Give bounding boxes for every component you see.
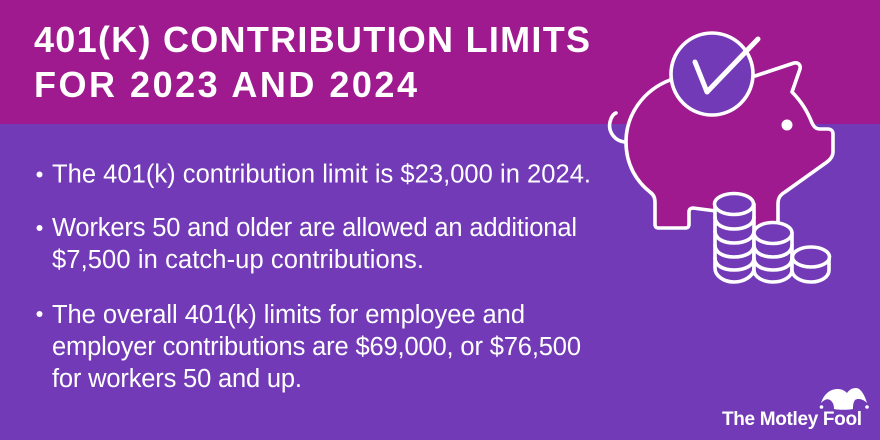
jester bell right	[865, 405, 869, 409]
bullet 2: $7,500 in catch-up contributions.	[52, 246, 424, 274]
check mark	[695, 39, 758, 92]
panel: lower background	[0, 124, 880, 440]
bullet 3	[36, 301, 581, 393]
title	[34, 19, 590, 105]
bullet 2: Workers 50 and older are allowed an additional	[52, 214, 577, 242]
logo: The Motley Fool	[722, 388, 869, 430]
bullet 3: for workers 50 and up.	[52, 365, 302, 393]
coin stack 3	[792, 247, 830, 282]
icon: piggy bank with coins	[610, 33, 833, 282]
bullet 3: The overall 401(k) limits for employee and	[52, 301, 525, 329]
panel: header band	[0, 0, 880, 124]
pig tail	[610, 113, 625, 142]
bullet 2	[36, 214, 577, 274]
bullet 3: employer contributions are $69,000, or $76,500	[52, 333, 581, 361]
pig eye	[782, 120, 792, 130]
check badge	[671, 33, 753, 115]
logo wordmark: The Motley Fool	[722, 409, 862, 430]
jester bell left	[820, 405, 823, 409]
bullet 1: The 401(k) contribution limit is $23,000 in 2024.	[52, 160, 591, 188]
title: FOR 2023 AND 2024	[34, 64, 417, 105]
coin stack 2	[754, 222, 792, 282]
title: 401(K) CONTRIBUTION LIMITS	[34, 19, 590, 60]
coin stack 1	[714, 194, 754, 282]
pig body	[626, 63, 833, 235]
icon: jester hat	[821, 388, 867, 410]
bullet list	[36, 160, 591, 393]
